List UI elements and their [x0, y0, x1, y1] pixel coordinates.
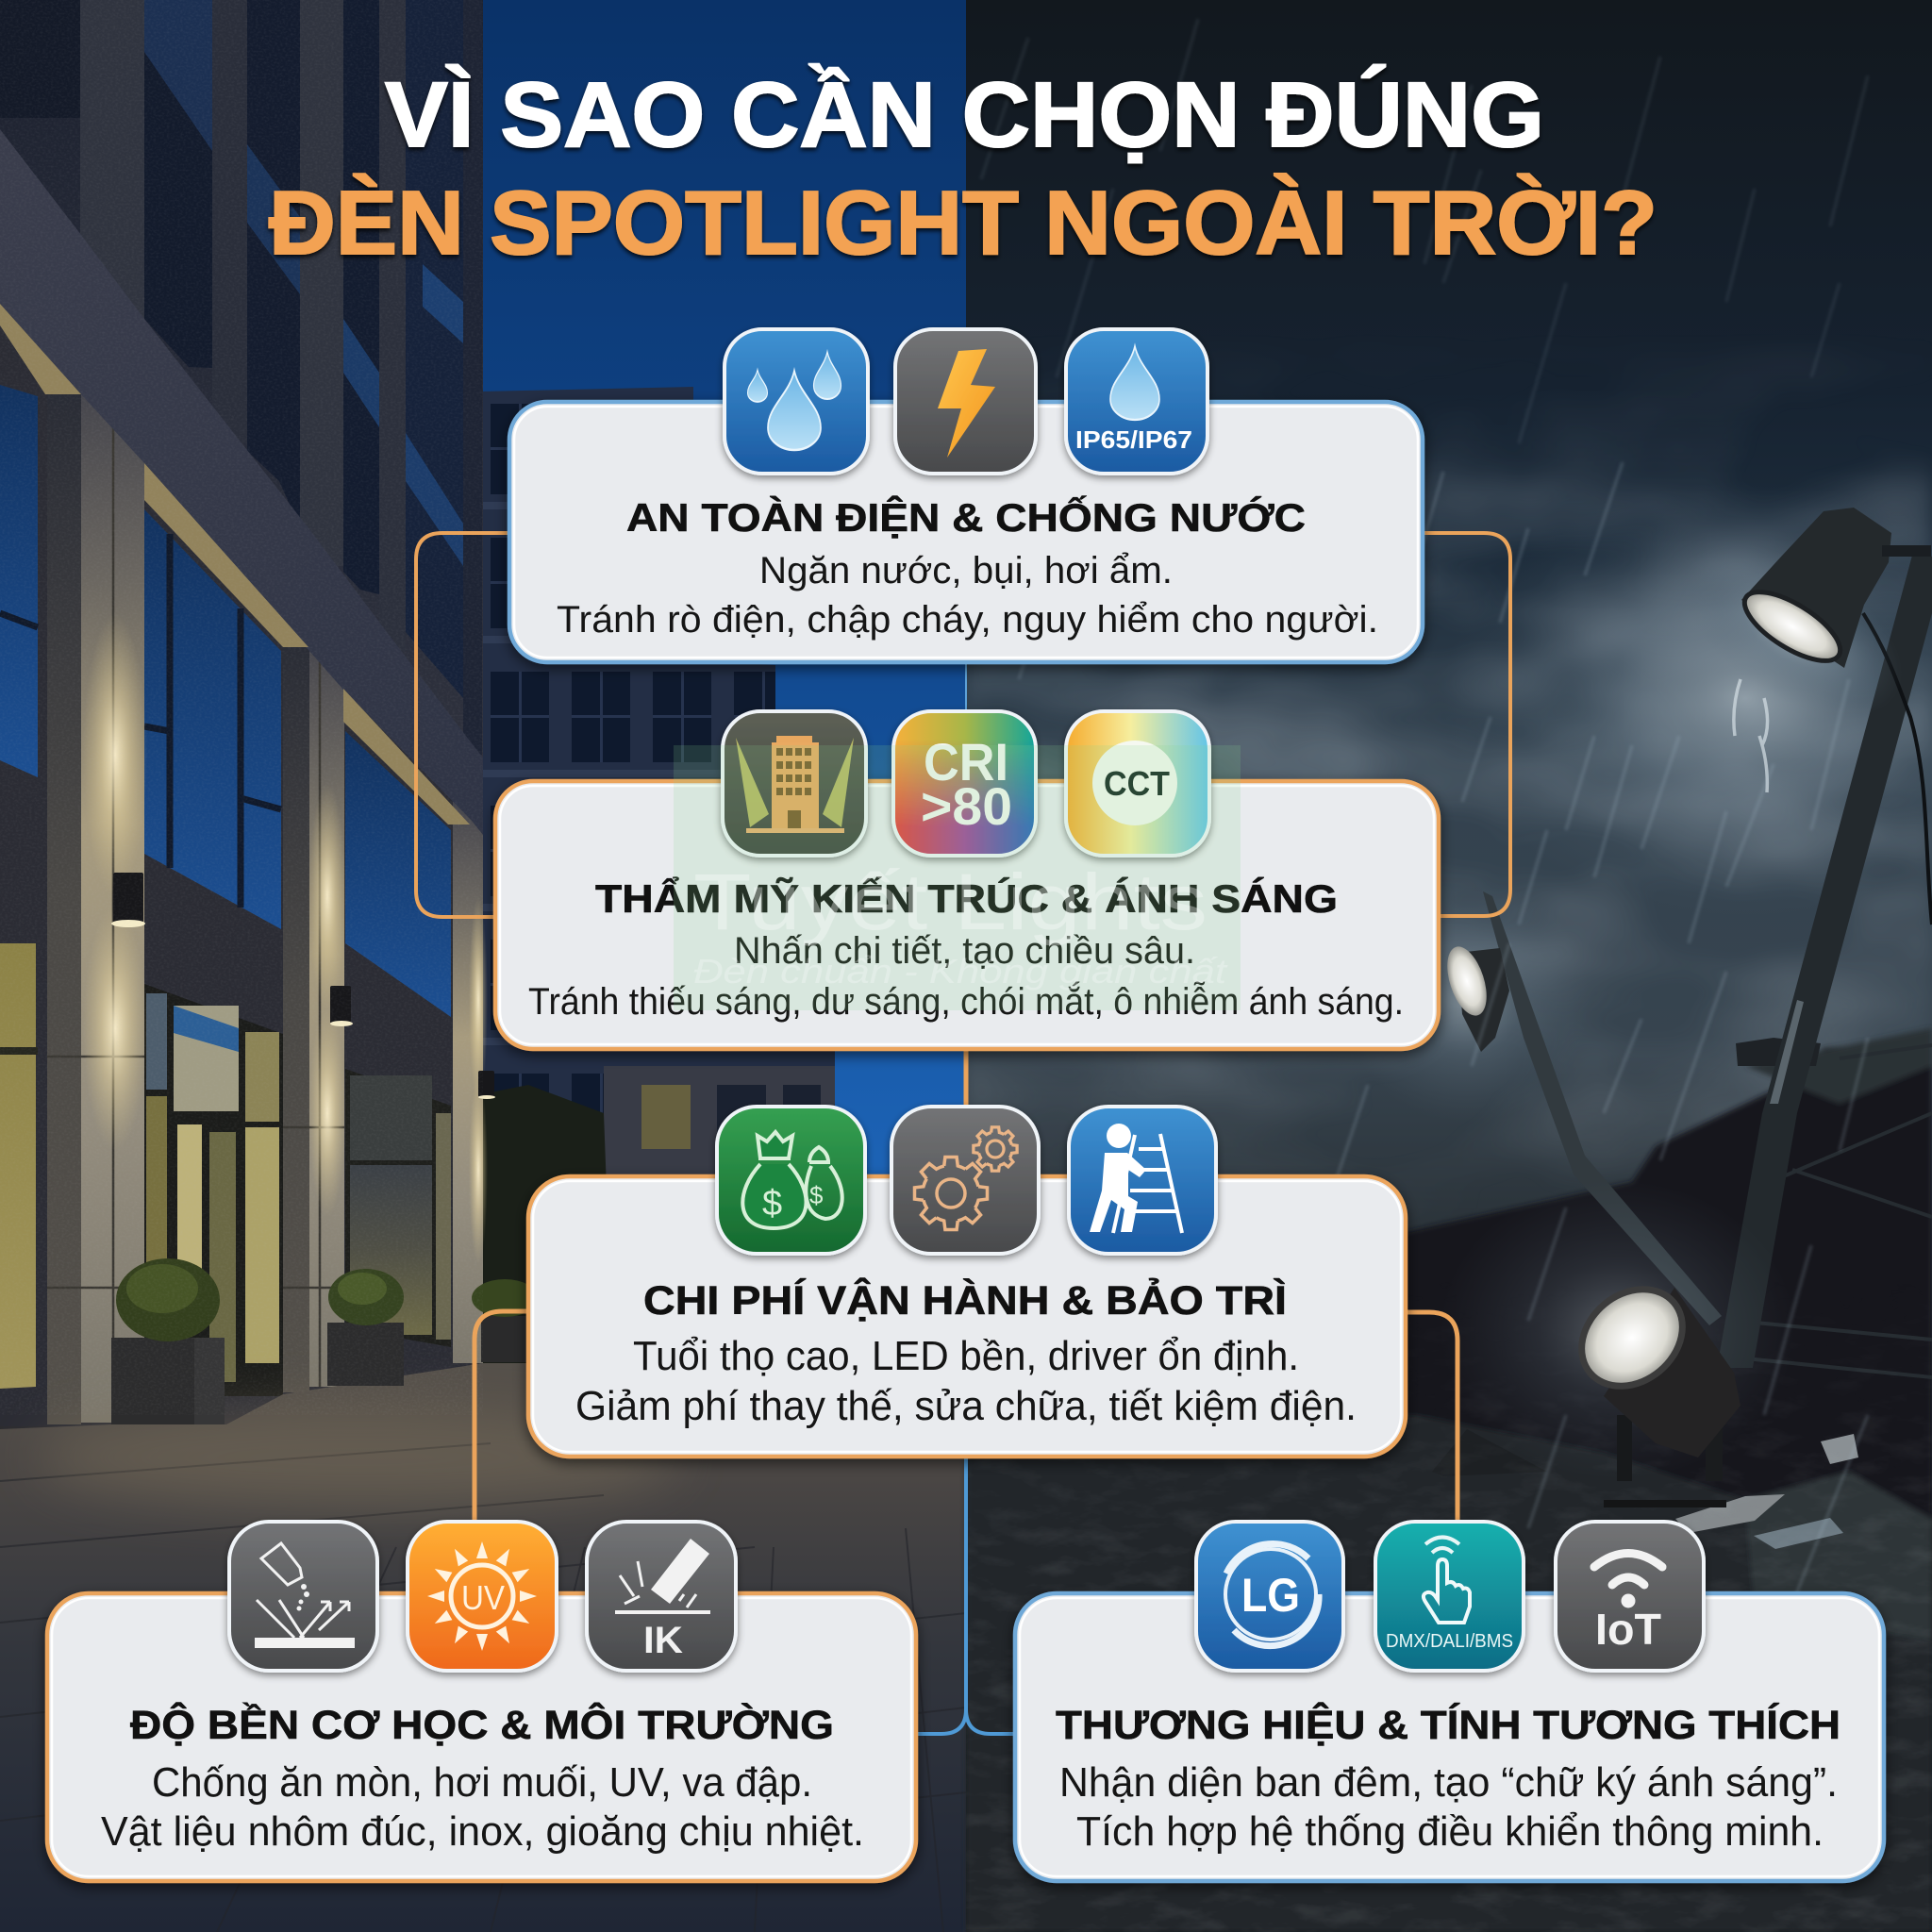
warm soffit light strips: [0, 304, 470, 824]
connector: panel 3 right: [1406, 1312, 1457, 1521]
body text: [557, 550, 1378, 641]
icon: touch control DMX/DALI/BMS: DMX/DALI/BMS: [1386, 1631, 1513, 1652]
panel: brand and compatibility: [1015, 1522, 1884, 1881]
body text: [528, 930, 1404, 1023]
icon: money bags: $: [809, 1181, 824, 1209]
body text: Tránh thiếu sáng, dư sáng, chói mắt, ô nhiễm ánh sáng.: [528, 980, 1404, 1023]
ground floor dark wall: [0, 304, 483, 1426]
connector: panel 3 to lower panels: [917, 1457, 1014, 1734]
upper floor windows: [0, 0, 463, 698]
body text: Tích hợp hệ thống điều khiển thông minh.: [1076, 1808, 1824, 1855]
heading: ĐỘ BỀN CƠ HỌC & MÔI TRƯỜNG: [130, 1702, 834, 1748]
heading: THƯƠNG HIỆU & TÍNH TƯƠNG THÍCH: [1056, 1702, 1840, 1748]
connector: panel 1 to panel 2 left: [416, 533, 509, 917]
ground floor glazing: [0, 943, 451, 1396]
icon: CCT colour temperature: [1066, 711, 1209, 856]
background: day side building and blue sky: [0, 0, 966, 1932]
stone spandrel band: [0, 129, 483, 835]
icon: gears: [891, 1107, 1039, 1254]
body text: [1059, 1759, 1838, 1855]
background: night storm side: [966, 0, 1932, 1932]
icon: LG brand logo: [1196, 1522, 1343, 1671]
icon: UV sun: [408, 1522, 557, 1671]
watermark: Tuyết Lights: Đèn chuẩn - Không gian chất: [693, 952, 1228, 991]
icon: CCT colour temperature: CCT: [1104, 764, 1170, 803]
icon: IoT wifi: IoT: [1595, 1605, 1661, 1654]
title line 2: ĐÈN SPOTLIGHT NGOÀI TRỜI?: [269, 173, 1657, 274]
heading: CHI PHÍ VẬN HÀNH & BẢO TRÌ: [643, 1277, 1287, 1324]
connector lines: [416, 533, 1510, 1734]
paved walkway: [0, 1363, 966, 1932]
icon: IP65/IP67 rating: IP65/IP67: [1075, 425, 1192, 454]
title line 1: VÌ SAO CẦN CHỌN ĐÚNG: [385, 63, 1544, 166]
watermark: Tuyết Lights: Tuyết Lights: [693, 858, 1208, 946]
upper piers: [80, 0, 482, 755]
wall light glows: [83, 613, 488, 1264]
body text: Tuổi thọ cao, LED bền, driver ổn định.: [633, 1333, 1299, 1379]
icon: IP65/IP67 rating: [1066, 329, 1208, 474]
connector: panel 1 to panel 2 right: [1423, 533, 1510, 916]
icon: CRI above 80: >80: [921, 776, 1012, 836]
panel card: [1015, 1593, 1884, 1881]
stone piers: [47, 354, 483, 1424]
body text: Nhận diện ban đêm, tạo “chữ ký ánh sáng”.: [1059, 1759, 1838, 1806]
body text: [101, 1759, 864, 1855]
storm clouds: [968, 435, 1932, 1170]
body text: Giảm phí thay thế, sửa chữa, tiết kiệm điện.: [575, 1383, 1357, 1429]
distant building: [481, 387, 835, 1377]
wall light fixtures: [111, 873, 495, 1099]
icon: water drops: [724, 329, 868, 474]
panel: electrical safety and waterproofing: [509, 329, 1423, 662]
panel: operating and maintenance costs: [528, 1107, 1406, 1457]
storm lamp: ground spotlight: [1439, 1179, 1797, 1507]
icon: lightning bolt: [895, 329, 1036, 474]
icon: lit building: [723, 711, 866, 856]
icon: touch control DMX/DALI/BMS: [1375, 1522, 1524, 1671]
icon: worker on ladder: [1069, 1107, 1216, 1254]
icon: CRI above 80: CRI: [924, 732, 1008, 791]
rain streaks upper: [981, 19, 1868, 443]
panel card: [495, 781, 1439, 1049]
body text: [575, 1333, 1357, 1429]
icon: money bags: [717, 1107, 865, 1254]
body text: Vật liệu nhôm đúc, inox, gioăng chịu nhiệt.: [101, 1808, 864, 1855]
body text: Chống ăn mòn, hơi muối, UV, va đập.: [152, 1759, 812, 1806]
rain streaks lower: [1019, 462, 1868, 1792]
storm lamp: broken pole lamp: [1440, 891, 1722, 1325]
icon: money bags: $: [762, 1184, 782, 1224]
heading: AN TOÀN ĐIỆN & CHỐNG NƯỚC: [626, 494, 1306, 540]
connector: panel 3 left: [475, 1311, 527, 1521]
icon: UV sun: UV: [461, 1578, 505, 1617]
heading: THẨM MỸ KIẾN TRÚC & ÁNH SÁNG: [595, 875, 1338, 921]
body text: Nhấn chi tiết, tạo chiều sâu.: [734, 930, 1195, 972]
icon: LG brand logo: LG: [1241, 1569, 1300, 1622]
panel card: [509, 402, 1423, 662]
trees behind planters: [481, 1085, 613, 1368]
blue glass windows: [0, 385, 451, 1017]
stone texture: [0, 0, 483, 1415]
title: [269, 63, 1657, 274]
panel card: [47, 1593, 916, 1881]
dark ground and wreckage: [966, 1028, 1932, 1932]
lamp glow: [1443, 481, 1932, 915]
icon: IK impact rating: IK: [643, 1620, 683, 1661]
ground texture: [966, 1436, 1932, 1932]
icon: CRI above 80: [893, 711, 1036, 856]
main lamp pole: [1717, 552, 1932, 1368]
lit distant lower block: [604, 1066, 835, 1377]
panel card: [528, 1176, 1406, 1457]
body text: Tránh rò điện, chập cháy, nguy hiểm cho người.: [557, 599, 1378, 641]
connector: panel 1 down: [965, 662, 967, 780]
storm lamp: raised spotlight: [1654, 508, 1931, 792]
watermark: Tuyết Lights: [674, 745, 1241, 1010]
connector: panel 2 down: [964, 1049, 968, 1174]
building facade base: [0, 0, 483, 1434]
panel: architectural aesthetics and light: [495, 711, 1439, 1049]
body text: Ngăn nước, bụi, hơi ẩm.: [759, 550, 1173, 591]
planters with shrubs: [111, 1258, 538, 1424]
icon: corrosion resistance: [229, 1522, 377, 1671]
panel: mechanical and environmental durability: [47, 1522, 916, 1881]
icon: IK impact rating: [587, 1522, 736, 1671]
icon: IoT wifi: [1556, 1522, 1704, 1671]
